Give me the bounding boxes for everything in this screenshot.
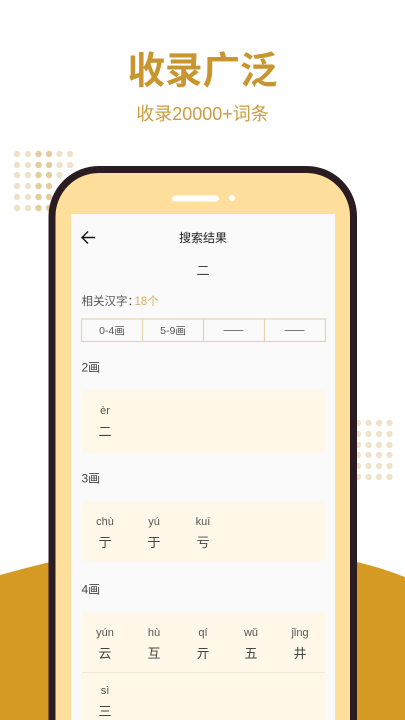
stroke filter tabs: 5-9画 [160, 325, 186, 337]
title: 收录广泛 [128, 50, 278, 92]
section: 4 strokes: yún [96, 627, 114, 639]
section: 2 strokes: èr [100, 405, 110, 417]
section: 3 strokes: kuī [196, 516, 211, 528]
section: 2 strokes: 2画 [82, 360, 100, 374]
phone body [52, 170, 354, 720]
section: 4 strokes: sì [101, 685, 109, 697]
subtitle: 收录20000+词条 [136, 104, 269, 124]
section: 4 strokes [82, 582, 325, 720]
speaker [172, 196, 219, 202]
stroke filter tabs: 0-4画 [99, 325, 125, 337]
section: 4 strokes: 亓 [196, 646, 210, 661]
dot pattern: left [14, 151, 73, 211]
related count: 相关汉字： [82, 294, 139, 308]
back arrow [82, 232, 95, 244]
app screen [71, 214, 335, 720]
section: 4 strokes: wǔ [243, 627, 258, 639]
section: 3 strokes: 亏 [196, 535, 210, 550]
camera [229, 195, 235, 201]
related count [82, 294, 159, 308]
section: 2 strokes: 二 [98, 424, 112, 439]
section: 4 strokes: 4画 [82, 582, 100, 596]
section: 4 strokes: 云 [98, 646, 112, 661]
section: 4 strokes: 三 [98, 704, 112, 719]
section: 4 strokes: hù [148, 627, 160, 639]
dot pattern: right [355, 420, 393, 480]
section: 3 strokes: chù [96, 516, 114, 528]
background hill [0, 562, 405, 720]
section: 3 strokes: 亍 [98, 535, 112, 550]
stroke filter tabs [82, 319, 326, 342]
search term: 二 [196, 263, 210, 278]
section: 3 strokes: 于 [147, 535, 161, 550]
section: 4 strokes: 井 [293, 646, 307, 661]
related count: 18个 [134, 295, 159, 308]
section: 4 strokes: jǐng [290, 627, 309, 639]
section: 3 strokes [82, 472, 325, 562]
section: 4 strokes: 五 [244, 646, 258, 661]
screen title: 搜索结果 [179, 230, 227, 245]
section: 3 strokes: 3画 [82, 472, 100, 486]
section: 2 strokes [82, 360, 325, 453]
section: 3 strokes: yú [148, 516, 160, 528]
section: 4 strokes: 互 [147, 646, 161, 661]
section: 4 strokes: qí [198, 627, 208, 639]
phone mockup [52, 170, 354, 720]
